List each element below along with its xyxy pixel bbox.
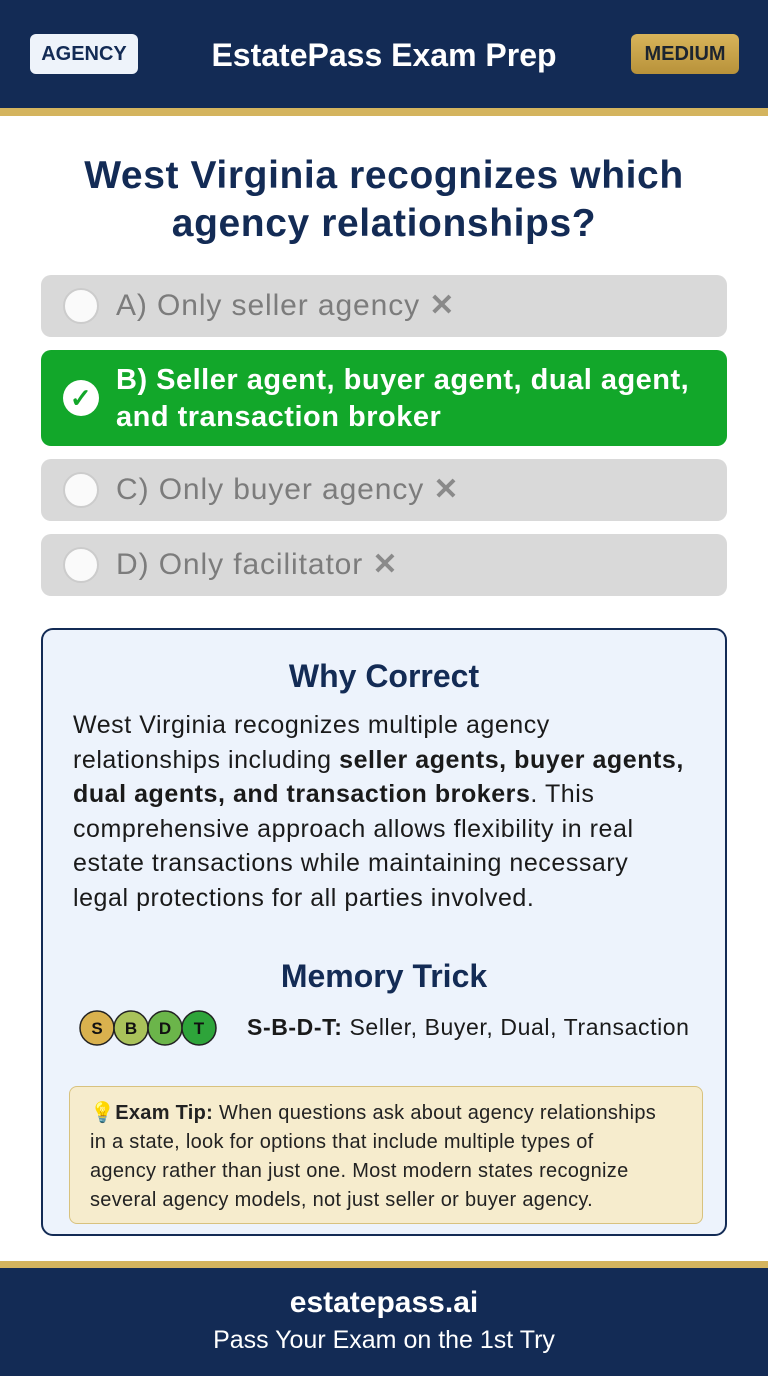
- text: explanation: West Virginia recognizes multiple agency: [73, 711, 550, 739]
- text: explanation: comprehensive approach allows flexibility in real: [73, 814, 634, 842]
- badge: medium: MEDIUM: [644, 43, 726, 65]
- icon: SBDT circles: T: [194, 1019, 205, 1038]
- badge: agency: [30, 34, 138, 74]
- text: explanation: relationships including seller agents, buyer agents,: [73, 746, 684, 774]
- header: [0, 0, 768, 116]
- icon: SBDT circles: S: [91, 1019, 103, 1038]
- text: explanation: legal protections for all parties involved.: [73, 884, 534, 912]
- icon: SBDT circles: B: [125, 1019, 137, 1038]
- text: explanation: estate transactions while maintaining necessary: [73, 849, 628, 877]
- footer: brand: estatepass.ai: [290, 1286, 478, 1319]
- option B correct: B) Seller agent, buyer agent, dual agent,: [116, 364, 689, 396]
- callout: exam tip: [69, 1086, 703, 1224]
- option D: [41, 534, 727, 596]
- callout: exam tip: in a state, look for options that include multiple types of: [90, 1131, 594, 1153]
- text: explanation: [73, 711, 684, 912]
- option B correct: [41, 350, 727, 446]
- callout: exam tip: several agency models, not just seller or buyer agency.: [90, 1189, 593, 1211]
- text: explanation: dual agents, and transaction brokers. This: [73, 780, 594, 808]
- option D: D) Only facilitator ✕: [116, 548, 398, 581]
- heading: memory trick: Memory Trick: [281, 958, 487, 994]
- badge: agency: AGENCY: [41, 43, 127, 65]
- option A: [41, 275, 727, 337]
- question: West Virginia recognizes which agency relationships?: [84, 154, 684, 245]
- title: brand: EstatePass Exam Prep: [211, 37, 557, 73]
- icon: SBDT circles: [79, 1010, 217, 1046]
- text: mnemonic: S-B-D-T: Seller, Buyer, Dual, Transaction: [247, 1014, 690, 1040]
- callout: exam tip: agency rather than just one. Most modern states recognize: [90, 1160, 628, 1182]
- callout: exam tip: 💡Exam Tip: When questions ask about agency relationships: [90, 1102, 656, 1124]
- icon: SBDT circles: D: [159, 1019, 171, 1038]
- option C: C) Only buyer agency ✕: [116, 473, 459, 506]
- panel: explanation: [41, 628, 727, 1236]
- option B correct: ✓: [70, 383, 92, 413]
- option C: [41, 459, 727, 521]
- option B correct: and transaction broker: [116, 401, 441, 433]
- option A: A) Only seller agency ✕: [116, 289, 455, 322]
- heading: why correct: Why Correct: [289, 658, 479, 694]
- badge: medium: [631, 34, 739, 74]
- footer: [0, 1261, 768, 1376]
- footer: tagline: Pass Your Exam on the 1st Try: [213, 1326, 555, 1354]
